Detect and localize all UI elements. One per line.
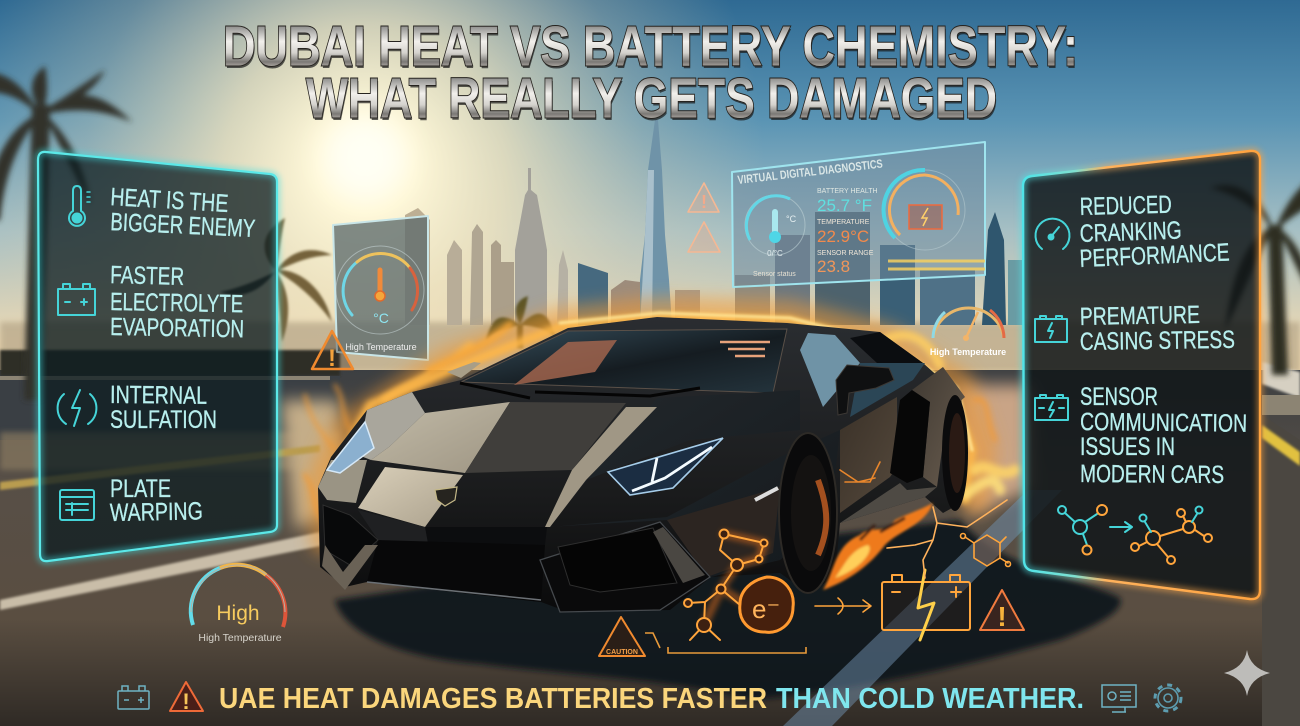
caution leader and bar: [645, 633, 806, 653]
rear fender: [912, 367, 965, 487]
lightning on side panel: [840, 462, 880, 482]
panel text: INTERNAL: [110, 381, 207, 410]
right hood dark panel: [547, 390, 840, 577]
panel text: FASTER: [110, 261, 185, 291]
thermometer gauge: °C: [786, 214, 797, 224]
flame wisps: [305, 325, 1015, 520]
title line 2: WHAT REALLY GETS DAMAGED: [306, 66, 997, 130]
title shadow line 1: DUBAI HEAT VS BATTERY CHEMISTRY:: [224, 17, 1079, 81]
background: Dubai skyline: [0, 120, 1300, 372]
temperature value: 22.9°C: [817, 227, 869, 246]
centre lower nose: [367, 540, 545, 602]
palm left: [0, 66, 132, 400]
background: palm trees: [0, 66, 1300, 400]
bottom banner: [118, 682, 1181, 715]
upper side reflection: [850, 363, 925, 417]
lower splitter: [367, 582, 541, 600]
chemistry nodes: [684, 530, 768, 632]
temperature label: TEMPERATURE: [817, 219, 870, 226]
hologram: small temperature gauge panel: [312, 216, 428, 372]
panel text: CASING STRESS: [1080, 326, 1235, 356]
lower side panel: [840, 397, 897, 513]
panel text: EVAPORATION: [110, 313, 244, 343]
palm right: [1210, 172, 1300, 375]
icon: warning triangle: [170, 682, 203, 714]
hologram: high temperature small gauge: High Temperature: [930, 347, 1006, 357]
reaction arrow: [815, 598, 871, 614]
palm middle: [220, 218, 332, 342]
right headlight: [608, 438, 723, 495]
side intake: [890, 390, 930, 483]
status bars: [888, 261, 985, 269]
panel text: SULFATION: [110, 406, 217, 434]
warning mark: !: [328, 345, 336, 372]
rear wheel: [942, 395, 968, 511]
panel text: REDUCED: [1079, 191, 1172, 221]
rear quarter window: [850, 332, 923, 363]
left panel: [38, 152, 277, 561]
nose dark panel: [425, 527, 547, 555]
title line 1: DUBAI HEAT VS BATTERY CHEMISTRY:: [223, 14, 1078, 78]
gauge caption: High Temperature: [198, 632, 282, 644]
panel text: PREMATURE: [1080, 301, 1200, 331]
title shadow line 2: WHAT REALLY GETS DAMAGED: [307, 69, 998, 133]
thermometer gauge: 0/°C: [767, 249, 783, 258]
flames near rear wheel: [823, 503, 933, 590]
icon: monitor: [1102, 685, 1136, 712]
electron ball: e⁻: [752, 594, 780, 624]
panel text: COMMUNICATION: [1080, 408, 1247, 438]
panel text: BIGGER ENEMY: [110, 208, 256, 243]
hood far-left light panel: [358, 392, 425, 460]
panel text: SENSOR: [1080, 383, 1158, 411]
sports car: [318, 317, 968, 612]
sparkle watermark: [1224, 650, 1270, 696]
temperature gauge arcs: [336, 246, 424, 334]
icon: thermometer: [69, 186, 90, 226]
left grille: [323, 505, 378, 565]
panel text: PERFORMANCE: [1079, 238, 1230, 273]
front fender lower: [667, 487, 780, 577]
front wheel: [779, 433, 837, 593]
side marker: [755, 488, 778, 500]
right grille fin: [653, 527, 705, 583]
thermometer gauge: [745, 195, 805, 258]
battery gauge: [884, 170, 965, 250]
high temperature gauge on road: [191, 565, 285, 644]
panel text: CRANKING: [1079, 216, 1182, 248]
panel text: WARPING: [110, 497, 203, 527]
icon: battery: [118, 686, 149, 709]
left mirror: [447, 362, 481, 378]
hood right stripe: [545, 407, 657, 527]
molecule diagram: [1058, 505, 1212, 564]
right headlight DRL: [632, 447, 712, 491]
electron ball: [740, 577, 793, 632]
battery health label: BATTERY HEALTH: [817, 188, 878, 195]
background: road: [0, 350, 1300, 726]
bar glow: [725, 648, 790, 654]
hood centre panel: [465, 402, 626, 473]
lightning: [887, 500, 1007, 578]
gauge unit: °C: [373, 310, 389, 326]
title: [223, 14, 1079, 133]
glowing chemistry network: [684, 462, 1024, 640]
right grille frame: [540, 522, 710, 612]
battery health value: 25.7 °F: [817, 196, 872, 215]
centre road stripe: [783, 490, 1062, 726]
panel text: ELECTROLYTE: [110, 288, 243, 318]
panel text: PLATE: [110, 475, 171, 503]
icon: battery sensor: [1035, 395, 1068, 420]
gauge caption: High Temperature: [345, 342, 417, 352]
battery with bolt: [882, 570, 970, 640]
right grille mesh: [558, 528, 677, 592]
side window: [800, 333, 860, 407]
panel text: ISSUES IN: [1080, 433, 1175, 461]
icon: battery with bolt: [1035, 316, 1067, 342]
banner text: cyan part: THAN COLD WEATHER.: [776, 683, 1084, 715]
gauge value: High: [216, 602, 260, 625]
sill: [840, 483, 937, 523]
warning triangle: !: [997, 601, 1007, 632]
warning triangles: [688, 183, 720, 252]
left headlight: [327, 422, 374, 473]
caution text: CAUTION: [606, 649, 638, 656]
left bumper tip: [322, 545, 378, 590]
car shadow: [335, 520, 1121, 700]
windshield: [461, 329, 787, 393]
panel text: [110, 183, 256, 527]
icon: plate: [60, 490, 94, 520]
hologram: high temperature small gauge: [930, 308, 1006, 357]
windshield reflection: [514, 340, 617, 385]
sensor label: SENSOR RANGE: [817, 250, 874, 257]
hexagon molecule: [960, 534, 1010, 566]
wipers: [460, 383, 700, 398]
nose left panel: [358, 510, 430, 555]
front left fender light: [318, 460, 367, 503]
background: sky and sun: [0, 0, 1300, 400]
sensor status: Sensor status: [753, 271, 796, 278]
caution sign: [599, 617, 806, 656]
hood light stripe upper: [371, 402, 510, 473]
panel title: VIRTUAL DIGITAL DIAGNOSTICS: [737, 157, 883, 187]
chemistry bonds: [688, 534, 764, 640]
panel text: MODERN CARS: [1080, 460, 1224, 489]
palm behind diagnostics: [486, 296, 555, 348]
warning triangle: [312, 331, 353, 369]
icon: battery: [58, 284, 95, 315]
hood lower stripe: [358, 467, 463, 527]
sensor value: 23.8: [817, 257, 850, 276]
right panel: [1023, 151, 1260, 599]
right mirror: [836, 365, 894, 415]
warning triangle: [980, 590, 1024, 632]
chemistry glow: [704, 534, 764, 625]
car body silhouette: [318, 317, 967, 612]
icon: gauge: [1036, 219, 1070, 249]
hologram: virtual digital diagnostics panel: [688, 142, 985, 287]
flames behind the car: [305, 312, 1015, 540]
windshield dash reflections: [720, 342, 770, 356]
icon: warning triangle: !: [182, 689, 190, 714]
banner text: amber part: UAE HEAT DAMAGES BATTERIES FASTER: [219, 683, 767, 715]
logo badge: [435, 487, 457, 506]
panel text: [1079, 191, 1247, 489]
icon: gear: [1155, 685, 1181, 711]
panel text: HEAT IS THE: [110, 183, 229, 218]
warning triangles: !: [701, 192, 707, 212]
icon: sulfation cycle: [58, 390, 96, 426]
